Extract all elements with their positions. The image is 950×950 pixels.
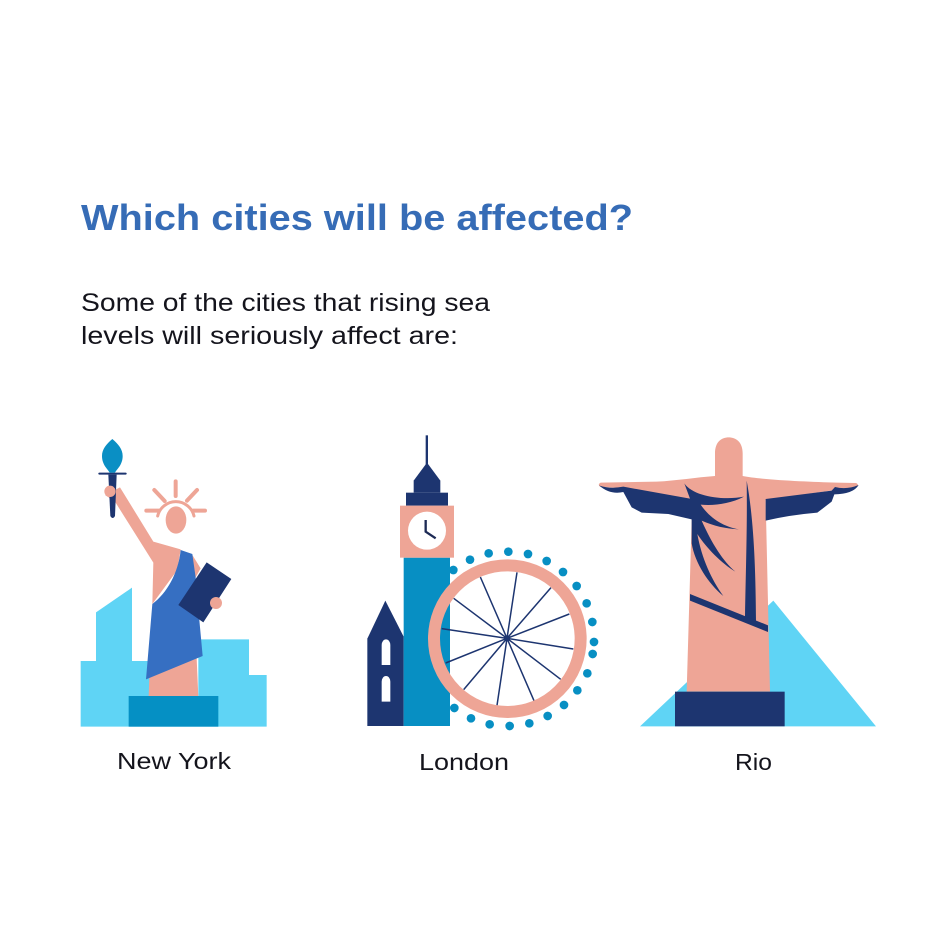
tower roof and spire <box>406 435 448 506</box>
robe fold <box>745 481 756 622</box>
waist band <box>690 594 768 632</box>
head and crown <box>146 481 205 534</box>
tower <box>404 558 450 726</box>
statue silhouette <box>599 437 858 692</box>
pedestal <box>675 692 785 726</box>
statue body <box>105 487 201 697</box>
left sleeve and folds <box>599 481 859 632</box>
label: London: London <box>419 749 509 775</box>
hand holding book <box>210 597 222 609</box>
intro text: levels will seriously affect are: <box>81 322 458 350</box>
small building <box>367 601 404 726</box>
torch <box>98 439 127 518</box>
illustration: London, Big Ben and London Eye <box>367 435 598 730</box>
title: Which cities will be affected? <box>81 197 633 238</box>
wheel spokes <box>442 572 573 705</box>
intro text: Some of the cities that rising sea <box>81 289 490 317</box>
water <box>129 696 218 727</box>
mountain <box>640 601 876 726</box>
label: New York: New York <box>117 748 232 774</box>
illustration: Rio, Christ the Redeemer <box>599 437 876 726</box>
wheel dots <box>449 547 598 730</box>
wheel ring <box>434 565 581 712</box>
illustration: New York, Statue of Liberty <box>81 439 267 727</box>
book <box>178 562 231 622</box>
robe <box>146 550 203 679</box>
skyline buildings <box>81 588 267 727</box>
raised hand <box>104 486 116 497</box>
label: Rio: Rio <box>735 749 772 775</box>
intro text <box>81 289 490 350</box>
right sleeve <box>766 485 859 521</box>
clock <box>400 506 454 558</box>
